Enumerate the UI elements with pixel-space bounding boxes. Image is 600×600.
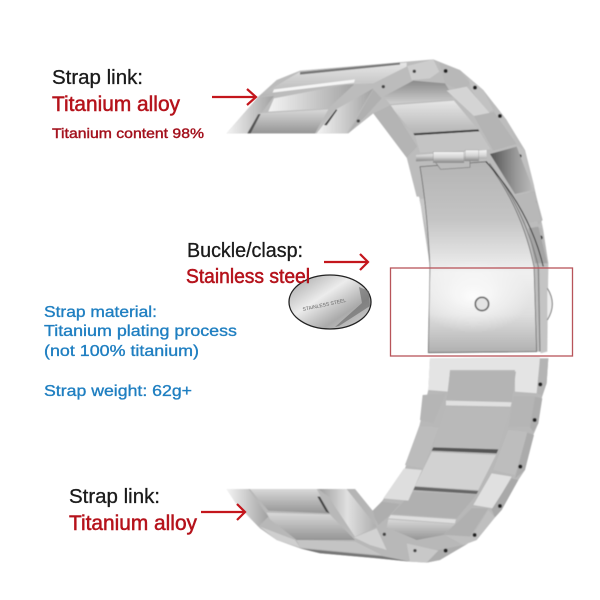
side release button: [547, 288, 552, 320]
side links next to clasp: [490, 147, 547, 263]
arrow: top strap link: [212, 89, 256, 105]
upper left strap links: [227, 63, 407, 133]
top strap link label: Titanium content 98%: [52, 125, 204, 141]
strap material text block: Titanium plating process: [44, 323, 237, 340]
top strap link label: Titanium alloy: [52, 93, 180, 116]
bottom strap link label: Strap link:: [69, 486, 160, 508]
inset: clasp stamp detail: [289, 275, 371, 329]
arrow: buckle: [324, 254, 368, 270]
buckle label: Stainless steel: [186, 266, 310, 288]
upper inner links: [373, 81, 517, 237]
outer side links with pins: [356, 358, 548, 563]
buckle label: Buckle/clasp:: [187, 240, 303, 262]
inner side links: [372, 393, 446, 525]
arrow: bottom strap link: [201, 504, 245, 520]
lower left strap links: [227, 489, 410, 562]
center links: [387, 357, 540, 540]
buckle clasp: [417, 162, 552, 353]
lower watch strap: [227, 357, 548, 563]
strap material text block: Strap weight: 62g+: [44, 383, 192, 400]
upper watch strap: [227, 59, 552, 353]
bottom strap link label: [69, 486, 197, 535]
inset: clasp stamp detail: STAINLESS STEEL: [302, 298, 347, 313]
strap material text block: (not 100% titanium): [44, 343, 199, 360]
lower strap base silhouette: [227, 358, 548, 563]
top strap link label: Strap link:: [52, 67, 143, 89]
clasp button: [475, 297, 489, 311]
upper outer side links with pins: [357, 59, 548, 263]
callout box: buckle: [390, 268, 572, 356]
upper strap base silhouette: [227, 59, 548, 353]
strap material text block: Strap material:: [44, 304, 157, 321]
top strap link label: [52, 67, 204, 141]
strap material text block: [44, 304, 237, 400]
buckle label: [186, 240, 310, 288]
clasp hinge: [416, 150, 487, 169]
bottom strap link label: Titanium alloy: [69, 512, 197, 535]
